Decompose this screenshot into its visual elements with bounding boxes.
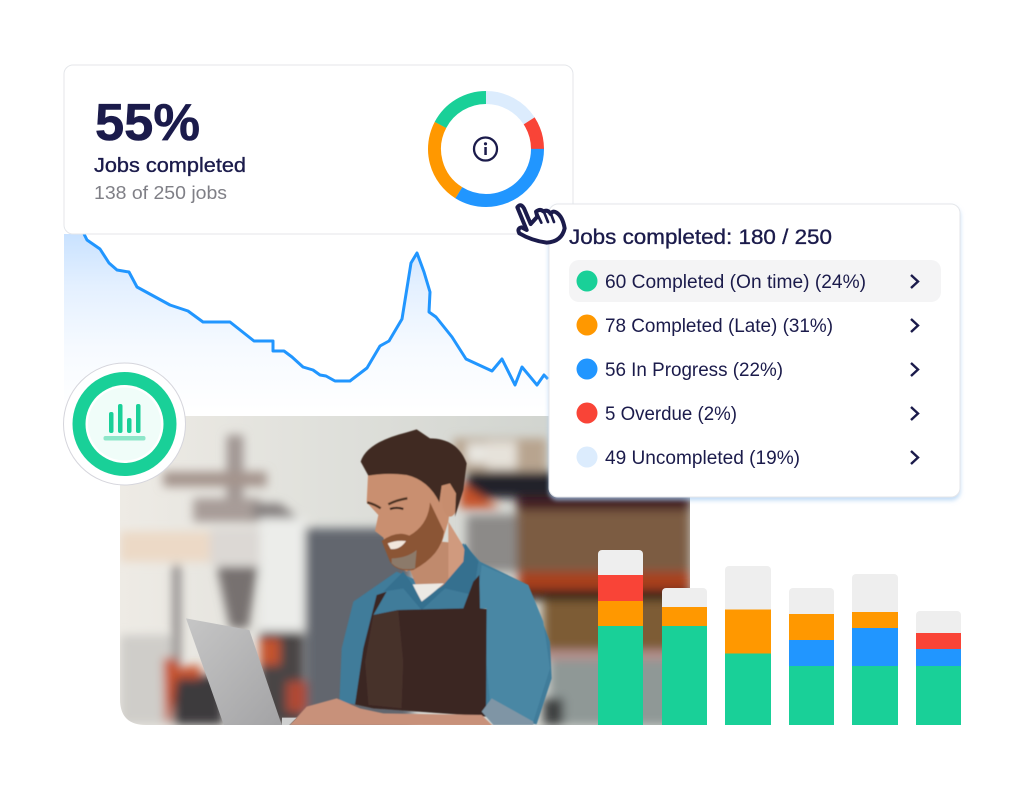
blurred workshop background — [120, 435, 690, 728]
man: face — [366, 473, 450, 572]
photo: man with laptop in workshop — [120, 416, 690, 728]
man: rolled sleeve — [482, 698, 533, 725]
man: beard — [382, 502, 444, 570]
row: in progress — [576, 358, 918, 381]
man figure — [290, 429, 552, 726]
row: on time: 60 Completed (On time) (24%) — [605, 272, 866, 293]
row: late: 78 Completed (Late) (31%) — [605, 316, 833, 337]
panel: jobs completed summary — [64, 65, 573, 234]
man: ear — [448, 488, 456, 518]
row: uncompleted — [576, 446, 918, 469]
row: in progress: 56 In Progress (22%) — [605, 360, 783, 381]
man: collar — [383, 543, 478, 610]
stacked bar chart — [598, 550, 961, 725]
bar 5 — [852, 574, 898, 725]
big percentage: 55% — [95, 94, 200, 152]
panel: jobs breakdown — [549, 204, 960, 497]
man: hair — [361, 429, 467, 517]
badge: chart icon — [64, 363, 186, 485]
row: late — [576, 314, 918, 337]
panel title: Jobs completed: 180 / 250 — [569, 226, 832, 249]
bar 2 — [662, 588, 707, 725]
bar 4 — [789, 588, 834, 725]
row: overdue: 5 Overdue (2%) — [605, 404, 737, 425]
donut chart — [415, 78, 557, 220]
sub-label: 138 of 250 jobs — [94, 183, 227, 203]
line chart — [64, 234, 548, 416]
bar 3 — [725, 566, 771, 725]
man: shirt — [339, 543, 552, 724]
icon: info — [474, 138, 497, 160]
row: uncompleted: 49 Uncompleted (19%) — [605, 448, 800, 469]
laptop — [186, 618, 282, 726]
row: overdue — [576, 402, 918, 425]
icon: hand cursor — [517, 205, 565, 243]
label: Jobs completed — [94, 155, 246, 177]
man: neck — [410, 541, 450, 588]
bar 6 — [916, 611, 961, 725]
man: apron — [355, 575, 487, 717]
man: hands — [290, 698, 493, 726]
man: eye and brow — [367, 498, 407, 508]
row: on time — [569, 260, 941, 302]
man: undershirt — [413, 583, 444, 602]
bar 1 — [598, 550, 643, 725]
